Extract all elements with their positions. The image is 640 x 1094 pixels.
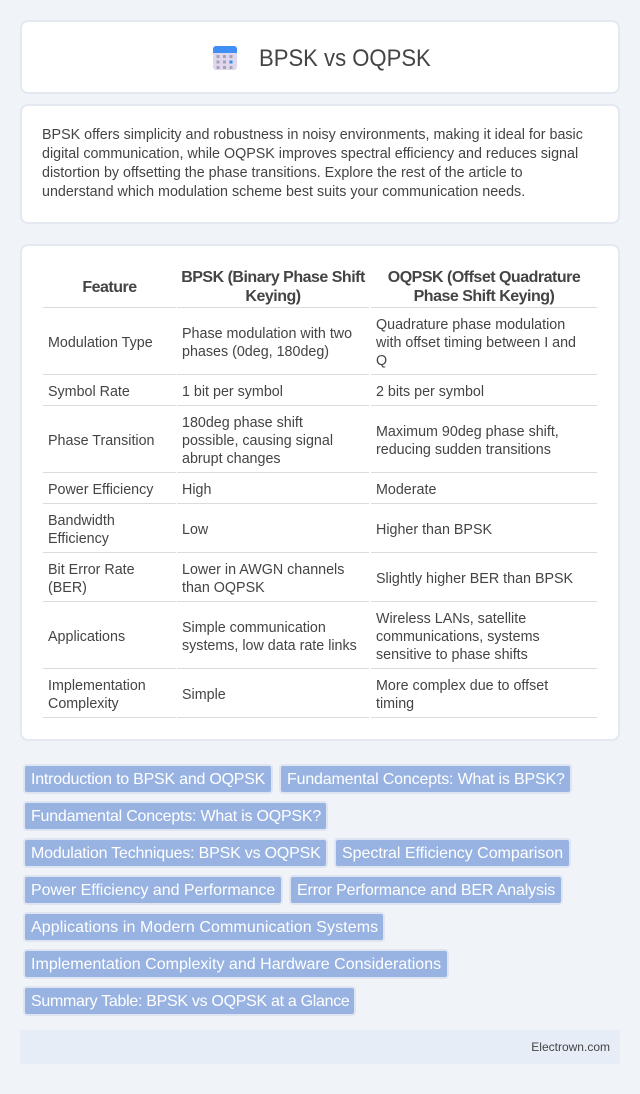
tag: Fundamental Concepts: What is OQPSK? bbox=[31, 808, 321, 825]
row: phase transition: Phase Transition bbox=[48, 433, 154, 449]
row: bit error rate: than OQPSK bbox=[182, 580, 265, 596]
row: bit error rate bbox=[48, 562, 573, 596]
title: BPSK vs OQPSK bbox=[259, 45, 431, 72]
row: applications bbox=[48, 611, 540, 663]
intro paragraph: BPSK offers simplicity and robustness in noisy environments, making it ideal for basic bbox=[42, 127, 583, 143]
row: phase transition: 180deg phase shift bbox=[182, 415, 303, 431]
tag: Spectral Efficiency Comparison bbox=[342, 845, 563, 862]
tag bbox=[23, 838, 328, 868]
intro text card bbox=[20, 104, 620, 224]
row: power efficiency: High bbox=[182, 482, 211, 498]
row: power efficiency bbox=[48, 482, 436, 498]
row: implementation complexity: Simple bbox=[182, 687, 226, 703]
row: applications: sensitive to phase shifts bbox=[376, 647, 528, 663]
row: applications: communications, systems bbox=[376, 629, 540, 645]
row: applications: systems, low data rate links bbox=[182, 638, 357, 654]
tag bbox=[23, 986, 356, 1016]
row: modulation type: Modulation Type bbox=[48, 335, 153, 351]
row: bit error rate: Lower in AWGN channels bbox=[182, 562, 344, 578]
tag bbox=[23, 764, 273, 794]
row: symbol rate: 2 bits per symbol bbox=[376, 384, 484, 400]
row: modulation type: Quadrature phase modulation bbox=[376, 317, 565, 333]
tag: Implementation Complexity and Hardware Considerations bbox=[31, 956, 441, 973]
row: power efficiency: Moderate bbox=[376, 482, 436, 498]
row: phase transition: possible, causing signal bbox=[182, 433, 333, 449]
tag bbox=[279, 764, 572, 794]
header card bbox=[20, 20, 620, 94]
row: modulation type: Q bbox=[376, 353, 387, 369]
intro paragraph: understand which modulation scheme best suits your communication needs. bbox=[42, 184, 525, 200]
tag bbox=[334, 838, 571, 868]
row: implementation complexity bbox=[48, 678, 548, 712]
intro paragraph bbox=[42, 127, 583, 200]
topic tags bbox=[23, 764, 572, 1016]
row: bandwidth efficiency: Efficiency bbox=[48, 531, 109, 547]
table header: Keying) bbox=[245, 288, 301, 305]
panel: comparison table bbox=[20, 244, 620, 741]
row: symbol rate bbox=[48, 384, 484, 400]
row: symbol rate: Symbol Rate bbox=[48, 384, 130, 400]
row: bit error rate: (BER) bbox=[48, 580, 87, 596]
row: modulation type bbox=[48, 317, 576, 369]
table header bbox=[82, 269, 580, 305]
row: phase transition: Maximum 90deg phase shift, bbox=[376, 424, 559, 440]
table header: Phase Shift Keying) bbox=[414, 288, 554, 305]
tag: Summary Table: BPSK vs OQPSK at a Glance bbox=[31, 993, 350, 1010]
tag bbox=[23, 949, 449, 979]
row: modulation type: with offset timing between I and bbox=[376, 335, 576, 351]
row: modulation type: Phase modulation with two bbox=[182, 326, 352, 342]
intro paragraph: digital communication, while OQPSK improves spectral efficiency and reduces signal bbox=[42, 146, 578, 162]
intro paragraph: distortion by offsetting the phase transitions. Explore the rest of the article to bbox=[42, 165, 523, 181]
tag bbox=[23, 875, 283, 905]
row: implementation complexity: Implementation bbox=[48, 678, 146, 694]
footer credit: Electrown.com bbox=[531, 1040, 610, 1054]
icon: calendar grid bbox=[213, 46, 237, 70]
row: implementation complexity: timing bbox=[376, 696, 414, 712]
table header: OQPSK (Offset Quadrature bbox=[388, 269, 580, 286]
row: bandwidth efficiency: Bandwidth bbox=[48, 513, 115, 529]
row: modulation type: phases (0deg, 180deg) bbox=[182, 344, 329, 360]
tag: Fundamental Concepts: What is BPSK? bbox=[287, 771, 565, 788]
row: bit error rate: Slightly higher BER than BPSK bbox=[376, 571, 573, 587]
tag: Error Performance and BER Analysis bbox=[297, 882, 555, 899]
row: applications: Applications bbox=[48, 629, 125, 645]
row: phase transition: reducing sudden transitions bbox=[376, 442, 551, 458]
row: bandwidth efficiency: Higher than BPSK bbox=[376, 522, 492, 538]
row: bandwidth efficiency bbox=[48, 513, 492, 547]
row: applications: Wireless LANs, satellite bbox=[376, 611, 526, 627]
row: power efficiency: Power Efficiency bbox=[48, 482, 153, 498]
row: implementation complexity: More complex due to offset bbox=[376, 678, 548, 694]
row: phase transition: abrupt changes bbox=[182, 451, 281, 467]
tag bbox=[23, 801, 328, 831]
row: applications: Simple communication bbox=[182, 620, 326, 636]
tag bbox=[23, 912, 385, 942]
row: bandwidth efficiency: Low bbox=[182, 522, 208, 538]
table header: BPSK (Binary Phase Shift bbox=[181, 269, 365, 286]
tag: Applications in Modern Communication Systems bbox=[31, 919, 378, 936]
tag: Introduction to BPSK and OQPSK bbox=[31, 771, 265, 788]
table header: Feature bbox=[82, 279, 137, 296]
row: bit error rate: Bit Error Rate bbox=[48, 562, 135, 578]
row: implementation complexity: Complexity bbox=[48, 696, 119, 712]
tag: Modulation Techniques: BPSK vs OQPSK bbox=[31, 845, 321, 862]
tag bbox=[289, 875, 563, 905]
row: phase transition bbox=[48, 415, 559, 467]
footer bbox=[20, 1030, 620, 1064]
tag: Power Efficiency and Performance bbox=[31, 882, 275, 899]
row: symbol rate: 1 bit per symbol bbox=[182, 384, 283, 400]
